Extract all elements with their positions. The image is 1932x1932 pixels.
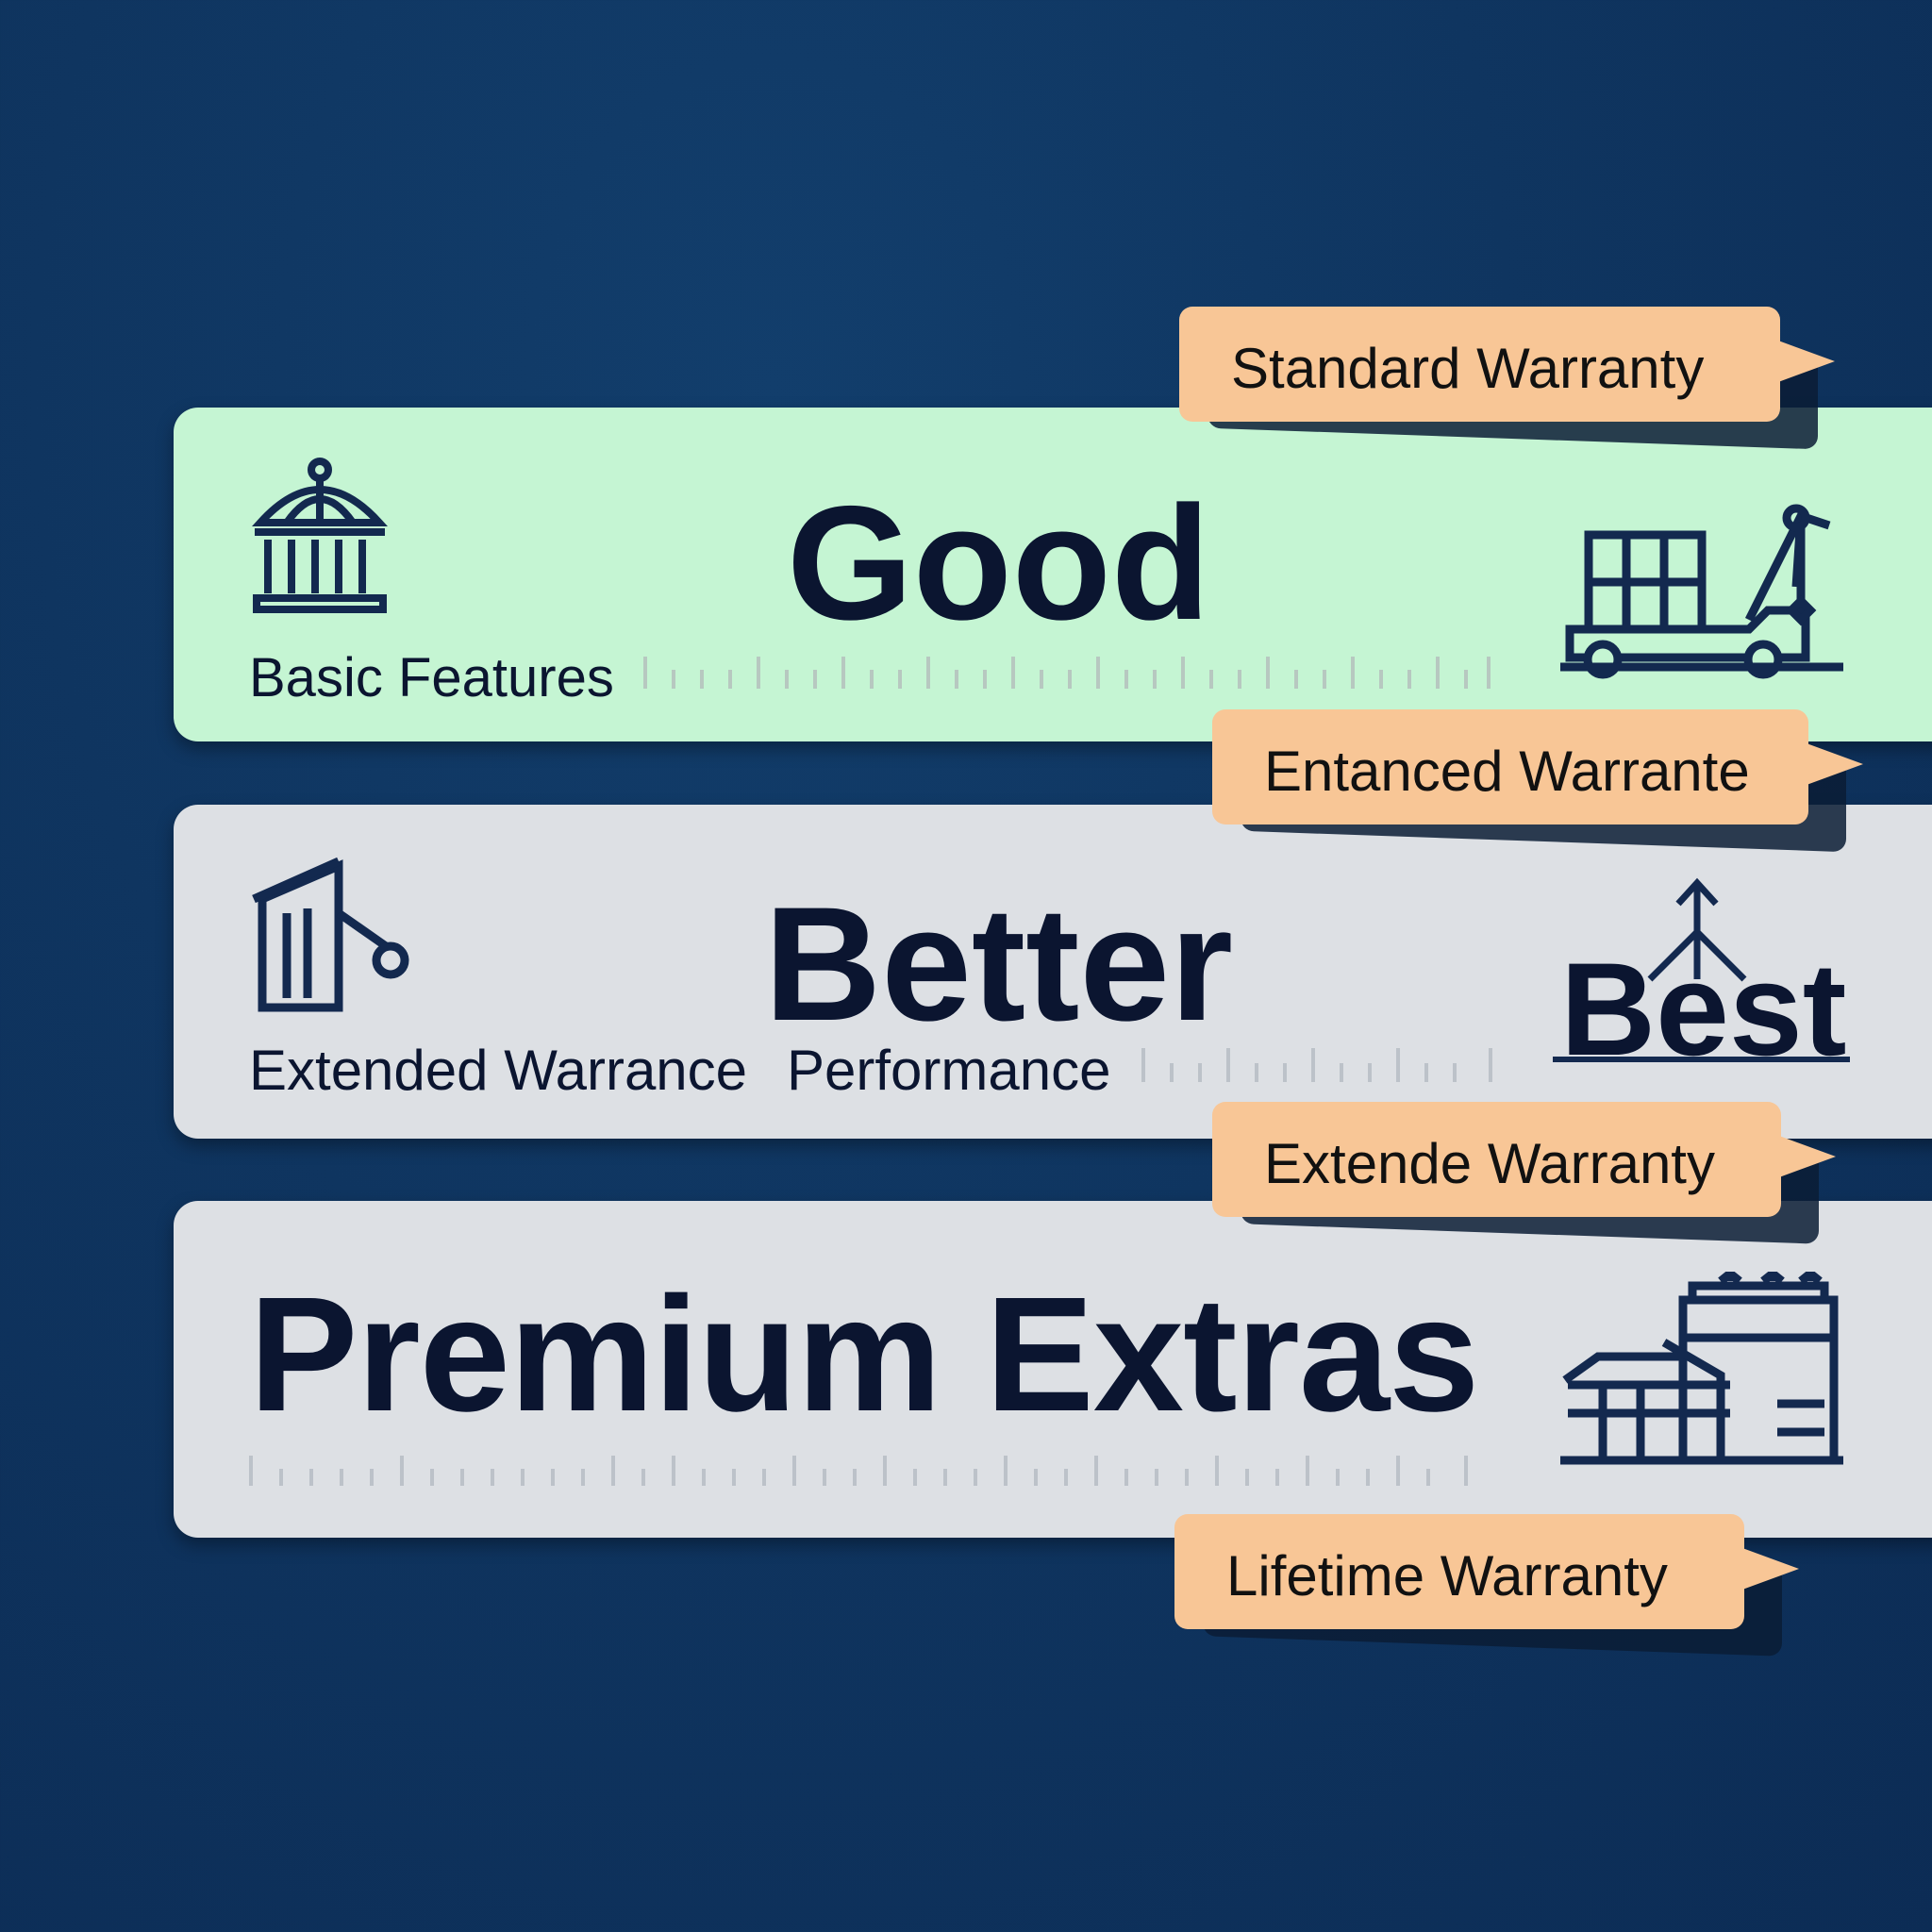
ruler [249, 1456, 1468, 1486]
band: better [174, 805, 1932, 1139]
tag: standard warranty [1179, 307, 1835, 449]
tag: entanced warrante: Entanced Warrante [1264, 740, 1750, 803]
icon: building with wrecking ball [252, 857, 409, 1011]
heading: good: Good [787, 473, 1210, 654]
tag: lifetime warranty [1174, 1514, 1799, 1657]
heading: best with arrow [1553, 877, 1850, 1083]
tag: entanced warrante [1212, 709, 1863, 852]
icon: warehouse [1560, 1272, 1843, 1464]
ruler [1141, 1048, 1492, 1082]
icon: pavilion [252, 458, 388, 613]
text: performance: Performance [787, 1039, 1110, 1102]
heading: best with arrow: Best [1560, 935, 1846, 1083]
icon: crane truck [1560, 504, 1843, 679]
heading: premium extras: Premium Extras [249, 1262, 1478, 1445]
band: premium extras [174, 1201, 1932, 1538]
tag: standard warranty: Standard Warranty [1231, 337, 1704, 400]
tag: extende warranty: Extende Warranty [1264, 1132, 1715, 1195]
band: good [174, 408, 1932, 741]
heading: better: Better [764, 874, 1233, 1055]
ruler [643, 657, 1491, 689]
text: basic features: Basic Features [249, 647, 614, 708]
tag: lifetime warranty: Lifetime Warranty [1226, 1544, 1668, 1607]
text: extended warrance: Extended Warrance [249, 1039, 747, 1102]
tag: extende warranty [1212, 1102, 1836, 1243]
